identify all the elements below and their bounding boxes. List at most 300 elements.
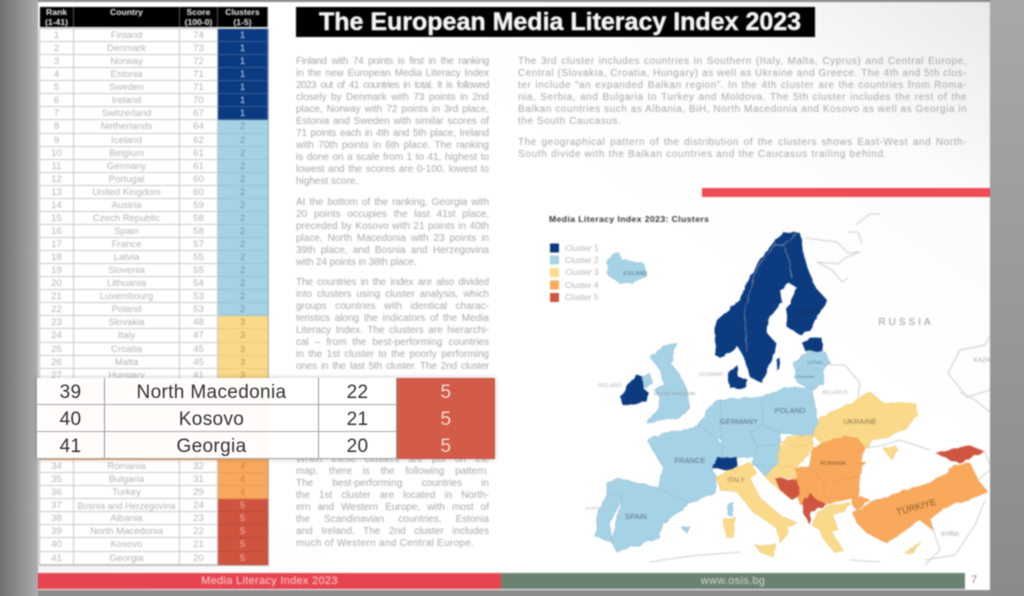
ranking table rows: Lithuania [107, 278, 146, 289]
ranking table rows: 20 [51, 278, 62, 289]
Crimea [883, 445, 898, 460]
ranking table rows: 71 [193, 69, 204, 80]
country labels: ROMANIA [820, 461, 846, 467]
ranking table rows: 2 [240, 291, 245, 302]
Sicily [755, 545, 777, 557]
ranking table rows: Iceland [111, 134, 142, 146]
text: left column paragraph 1: closely by Denmark with 73 points in 2nd [296, 92, 489, 103]
ranking table rows: 40 [51, 539, 62, 550]
Ukraine [813, 392, 917, 448]
row: Georgia [37, 432, 495, 459]
ranking table rows: 9 [54, 134, 59, 146]
Norway, Sweden and Finland [715, 232, 827, 383]
country labels: GERMANY [720, 417, 758, 426]
non-index country outlines [650, 214, 990, 565]
row: Kosovo: 5 [441, 409, 451, 430]
ranking table rows: 45 [193, 344, 204, 354]
background: right strip [990, 0, 1024, 596]
ranking table rows: 19 [51, 265, 62, 276]
text: left column paragraph 2: place, North Macedonia with 23 points in [296, 233, 489, 244]
country labels: LITHUANIA [794, 374, 815, 379]
text: left column paragraph 3: cal – from the best-performing countries [296, 337, 489, 348]
ranking table rows: Switzerland [102, 108, 151, 119]
ranking table rows: Croatia [111, 344, 142, 354]
ranking table rows: 3 [240, 317, 245, 328]
Romania [810, 437, 865, 485]
text: right column paragraph 2: South divide with the Balkan countries and the Caucasus trailing behind. [518, 149, 887, 160]
Denmark [727, 365, 748, 388]
row: North Macedonia: North Macedonia [137, 382, 286, 403]
ranking table rows: 2 [240, 148, 245, 159]
text: right column paragraph 2: The geographical pattern of the distribution of the clusters shows East-West and North- [518, 137, 967, 148]
text: left column paragraph 1: place, Norway with 72 points in 3rd place, [296, 104, 489, 115]
ranking table rows: 1 [240, 43, 245, 54]
text: left column paragraph 1: Finland with 74 points is first in the ranking [296, 56, 489, 67]
text: right column paragraph 1: Central (Slovakia, Croatia, Hungary) as well as Ukraine and Greece. The 4th and 5th clus- [518, 68, 967, 79]
ranking table rows: 60 [193, 174, 204, 185]
ranking table rows: 4 [240, 461, 245, 472]
Thrace [852, 497, 870, 510]
ranking table rows: 23 [51, 317, 62, 328]
ranking table rows: 70 [193, 95, 204, 106]
Austria [752, 445, 780, 467]
ranking table rows: 5 [240, 552, 245, 564]
ranking table rows: 2 [240, 304, 245, 315]
ranking table rows: 3 [240, 357, 245, 368]
ranking table rows: Poland [112, 304, 141, 315]
ranking table rows: 20 [193, 552, 204, 564]
footer left red bar: Media Literacy Index 2023 [201, 575, 338, 587]
row: Georgia: 5 [441, 436, 451, 457]
cluster 5 countries [775, 445, 985, 525]
Montenegro [797, 493, 807, 503]
row: Kosovo: 21 [347, 409, 368, 430]
Corsica [727, 502, 733, 515]
Sardinia [723, 517, 735, 538]
ranking table rows: 26 [51, 357, 62, 368]
text: left column paragraph 1 [296, 56, 490, 187]
ranking table rows: Austria [112, 200, 141, 211]
Hungary [777, 443, 813, 468]
ranking table rows: 2 [240, 239, 245, 250]
ranking table rows: 2 [240, 174, 245, 185]
ranking table rows: 27 [51, 370, 62, 381]
ranking table rows: Luxembourg [100, 291, 153, 302]
text: left column paragraph 4: and Ireland. The 2nd cluster includes [296, 526, 489, 537]
text: right column paragraph 1 [518, 56, 967, 127]
text: left column paragraph 3: groups countries with identical charac- [296, 301, 489, 312]
table header: Clusters [225, 7, 260, 17]
table header: (1-41) [45, 17, 68, 27]
row: Kosovo: Kosovo [179, 409, 244, 430]
Croatia [765, 465, 797, 498]
Estonia [802, 337, 823, 352]
text: left column paragraph 1: lowest and the scores are 0-100, lowest to [296, 164, 489, 175]
text: left column paragraph 1: is done on a scale from 1 to 41, highest to [296, 152, 489, 163]
ranking table rows: 3 [240, 370, 245, 381]
text: left column paragraph 4: the 1st cluster are located in North- [296, 490, 489, 501]
row: North Macedonia: 22 [347, 382, 368, 403]
Bosnia and Herzegovina [775, 478, 800, 500]
ranking table rows: 37 [51, 500, 62, 511]
country labels: LATVIA [807, 360, 823, 365]
cluster 4 countries [795, 437, 988, 543]
table header [40, 7, 268, 27]
Swedish islands [776, 358, 781, 370]
ranking table rows: 64 [193, 121, 204, 132]
ranking table rows: Latvia [114, 252, 139, 263]
ranking table rows: Albania [110, 513, 142, 524]
ranking table rows: Denmark [107, 43, 146, 54]
ranking table rows: 53 [193, 304, 204, 315]
ranking table rows: 74 [193, 30, 204, 41]
country labels: FINLAND [796, 309, 820, 315]
text: left column paragraph 1: 2023 out of 41 countries in total. It is followed [296, 80, 489, 91]
ranking table rows: Germany [107, 161, 146, 172]
ranking table rows: 72 [193, 56, 204, 67]
United Kingdom [647, 343, 690, 423]
legend: Cluster 3 [565, 267, 599, 277]
Slovakia [780, 435, 813, 447]
table header: Score [187, 7, 210, 17]
ranking table rows: 2 [240, 187, 245, 198]
text: left column paragraph 2: 39th place, and Bosnia and Herzegovina [296, 245, 489, 256]
ranking table rows: 3 [240, 330, 245, 341]
ranking table rows: 1 [240, 56, 245, 67]
country labels: KAZA [974, 357, 991, 364]
ranking table rows: 2 [240, 252, 245, 263]
cluster 1 countries [621, 232, 827, 405]
country labels [586, 271, 991, 538]
country labels: RUSSIA [878, 317, 934, 328]
ranking table rows: 2 [240, 121, 245, 132]
Greece [812, 503, 850, 553]
ranking table rows: 21 [51, 291, 62, 302]
ranking table rows: 47 [193, 330, 204, 341]
ranking table rows: 34 [51, 461, 62, 472]
ranking table rows: 62 [193, 134, 204, 146]
row: North Macedonia [37, 378, 495, 405]
text: left column paragraph 3: into clusters using cluster analysis, which [296, 289, 489, 300]
text: right column paragraph 1: The 3rd cluster includes countries in Southern (Italy, Malta, Cyprus) and Central Europe, [518, 56, 967, 67]
ranking table rows: Norway [110, 56, 143, 67]
ranking table rows: 55 [193, 252, 204, 263]
ranking table rows: Belgium [109, 148, 144, 159]
text: left column paragraph 4: The best-performing countries in [296, 478, 489, 489]
text: left column paragraph 3: Literacy Index. The clusters are hierarchi- [296, 325, 489, 336]
country labels: BELARUS [822, 390, 848, 396]
ranking table rows: Malta [115, 357, 138, 368]
ranking table rows: Slovakia [108, 317, 145, 328]
ranking table rows: 1 [54, 30, 59, 41]
ranking table rows: 5 [240, 513, 245, 524]
ranking table rows: 7 [54, 108, 59, 119]
ranking table rows: Slovenia [108, 265, 145, 276]
background: left strip [0, 0, 38, 596]
legend: Cluster 2 [565, 255, 599, 265]
Czech Republic [750, 425, 780, 447]
text: right column paragraph 1: nia, Serbia, and Bulgaria to Turkey and Moldova. The 5th cluster includes the rest of the [518, 92, 967, 103]
text: left column paragraph 1: with 70th points in 6th place. The ranking [296, 140, 489, 151]
ranking table rows: 38 [51, 513, 62, 524]
text: left column paragraph 3: in the 1st cluster to the poorly performing [296, 349, 489, 360]
ranking table rows: France [112, 239, 141, 250]
row: Kosovo: 40 [60, 409, 81, 430]
ranking table rows: 32 [193, 461, 204, 472]
ranking table rows: 61 [193, 148, 204, 159]
text: right column paragraph 1: Balkan countries such as Albania, BiH, North Macedonia and Kosovo as well as Georgia in [518, 104, 967, 115]
Latvia [793, 352, 830, 370]
text: left column paragraph 2: preceded by Kosovo with 21 points in 40th [296, 221, 489, 232]
cluster 2 countries [595, 252, 830, 552]
ranking table rows: 1 [240, 108, 245, 119]
red accent bar [702, 188, 990, 197]
ranking table rows: 22 [51, 304, 62, 315]
country labels: ITALY [727, 477, 745, 484]
Bulgaria [823, 477, 860, 497]
ranking table rows: 13 [51, 187, 62, 198]
ranking table rows: Netherlands [101, 121, 152, 132]
text: right column paragraph 2 [518, 137, 967, 160]
country labels: FRANCE [675, 456, 705, 465]
ranking table rows: 2 [240, 226, 245, 237]
ranking table rows: United Kingdom [92, 187, 161, 198]
ranking table rows: 10 [51, 148, 62, 159]
Iceland [607, 252, 647, 283]
footer left red bar [38, 573, 501, 589]
Cyprus [905, 542, 920, 553]
ranking table rows: 71 [193, 82, 204, 93]
ranking table rows: 5 [54, 82, 59, 93]
Lithuania [795, 370, 823, 390]
ranking table rows: Bulgaria [109, 474, 144, 485]
ranking table rows: 3 [54, 56, 59, 67]
ranking table rows: 24 [193, 500, 204, 511]
ranking table rows: 53 [193, 291, 204, 302]
ranking table rows: 2 [240, 278, 245, 289]
Georgia [935, 445, 985, 463]
ranking table rows: 5 [240, 539, 245, 550]
ranking table rows: 36 [51, 487, 62, 498]
legend: Cluster 4 [565, 280, 599, 290]
ranking table rows: Italy [118, 330, 135, 341]
text: left column paragraph 1: in the new European Media Literacy Index [296, 68, 489, 79]
ranking table rows: 1 [240, 95, 245, 106]
ranking table rows: Estonia [110, 69, 142, 80]
Northern Ireland [642, 374, 652, 388]
ranking table rows: 39 [51, 526, 62, 537]
ranking table rows: Ireland [112, 95, 141, 106]
Spain [607, 478, 690, 552]
text: left column paragraph 3: ones in the last 5th cluster. The 2nd cluster [296, 361, 489, 372]
text: left column paragraph 1: Estonia and Sweden with similar scores of [296, 116, 489, 127]
row: North Macedonia: 5 [441, 382, 451, 403]
ranking table rows: Hungary [108, 370, 145, 381]
Poland [762, 388, 818, 437]
Portugal [595, 493, 622, 543]
ranking table rows: 5 [240, 500, 245, 511]
ranking table rows: Georgia [109, 552, 144, 564]
ranking table rows: Portugal [109, 174, 144, 185]
legend [550, 243, 599, 302]
legend: Cluster 5 [565, 292, 599, 302]
country labels: PORTUGAL [586, 506, 611, 511]
text: left column paragraph 1: highest score. [296, 176, 358, 187]
ranking table rows: 41 [51, 552, 62, 564]
ranking table rows: 4 [54, 69, 59, 80]
ranking table rows: Bosnia and Herzegovina [77, 501, 176, 511]
Moldova [843, 437, 865, 454]
text: left column paragraph 4: much of Western and Central Europe. [296, 538, 474, 549]
ranking table rows: 2 [240, 161, 245, 172]
ranking table rows: 21 [193, 539, 204, 550]
footer right green bar: www.osis.bg [701, 575, 765, 587]
ranking table rows: 31 [193, 474, 204, 485]
ranking table rows: Turkey [112, 487, 141, 498]
ranking table rows: 25 [51, 344, 62, 354]
ranking table rows: 35 [51, 474, 62, 485]
text: left column paragraph 4: When these clusters are put on the [296, 454, 489, 465]
text: right column paragraph 1: ter include “an expanded Balkan region”. In the 4th cluster are the countries from Roma- [518, 80, 967, 91]
ranking table rows: North Macedonia [90, 526, 163, 537]
country labels: UKRAINE [843, 417, 877, 426]
ranking table rows: 24 [51, 330, 62, 341]
text: left column paragraph 4: the Scandinavian countries, Estonia [296, 514, 489, 525]
highlight overlay: bottom three countries [37, 378, 495, 459]
Scandinavian borders [745, 234, 796, 352]
ranking table rows: Romania [107, 461, 146, 472]
ranking table rows: 2 [240, 134, 245, 146]
text: left column paragraph 3 [296, 277, 490, 372]
ranking table rows: 45 [193, 357, 204, 368]
ranking table rows: 61 [193, 161, 204, 172]
France [647, 425, 723, 503]
text: left column paragraph 3: The countries in the index are also divided [296, 277, 489, 288]
ranking table rows: 41 [193, 370, 204, 381]
ranking table rows: 1 [240, 30, 245, 41]
Switzerland [712, 457, 738, 470]
country labels: DENMARK [698, 372, 724, 378]
country labels: POLAND [775, 406, 806, 415]
text: left column paragraph 2: At the bottom of the ranking, Georgia with [296, 197, 489, 208]
map heading: Media Literacy Index 2023: Clusters [549, 214, 709, 224]
ranking table rows: 15 [51, 213, 62, 224]
ranking table rows: 14 [51, 200, 62, 211]
ranking table rows: 2 [240, 200, 245, 211]
footer right green bar [501, 573, 965, 589]
country labels: UNITED KINGDOM [653, 391, 695, 397]
row: Kosovo [37, 405, 495, 432]
ranking table rows: 18 [51, 252, 62, 263]
Germany [720, 397, 763, 458]
ranking table rows: 8 [54, 121, 59, 132]
Balearic islands [682, 526, 690, 533]
row: Georgia: 20 [347, 436, 368, 457]
ranking table rows: 5 [240, 526, 245, 537]
Serbia [795, 467, 825, 497]
ranking table rows: 60 [193, 187, 204, 198]
row: Georgia: 41 [60, 436, 81, 457]
Slovenia [755, 465, 777, 476]
country labels: ICELAND [623, 271, 647, 277]
text: left column paragraph 1: 71 points each in 4th and 5th place, Ireland [296, 128, 489, 139]
ranking table rows: 59 [193, 200, 204, 211]
country labels: SPAIN [625, 512, 647, 521]
ranking table rows: 2 [54, 43, 59, 54]
text: left column paragraph 4: map, there is the following pattern. [296, 466, 489, 477]
ranking table rows: Spain [114, 226, 139, 237]
ranking table rows: 54 [193, 278, 204, 289]
text: left column paragraph 2: with 24 points in 38th place. [296, 257, 417, 268]
cluster 4 base under the Balkans [790, 465, 860, 505]
title: The European Media Literacy Index 2023 [319, 8, 801, 36]
text: left column paragraph 4: ern and Western Europe, with most of [296, 502, 489, 513]
ranking table rows: 1 [240, 82, 245, 93]
ranking table rows: Kosovo [110, 539, 142, 550]
ranking table rows: 1 [240, 69, 245, 80]
ranking table rows: 58 [193, 226, 204, 237]
ranking table rows [40, 29, 268, 565]
ranking table rows: 55 [193, 265, 204, 276]
row: North Macedonia: 39 [60, 382, 81, 403]
country labels: IRELAND [598, 383, 622, 389]
ranking table rows: 73 [193, 43, 204, 54]
ranking table rows: 4 [240, 487, 245, 498]
ranking table rows: Finland [111, 30, 142, 41]
ranking table rows: 16 [51, 226, 62, 237]
ranking table rows: 2 [240, 213, 245, 224]
Albania, Kosovo and North Macedonia [803, 493, 827, 525]
page number: 7 [971, 574, 977, 586]
legend: Cluster 1 [565, 243, 599, 253]
text: left column paragraph 2: 20 points occupies the last 41st place, [296, 209, 489, 220]
text: left column paragraph 2 [296, 197, 490, 268]
Benelux [698, 400, 722, 440]
table header: Rank [46, 7, 67, 17]
ranking table rows: 48 [193, 317, 204, 328]
text: right column paragraph 1: the South Caucasus. [518, 116, 621, 127]
table header: (100-0) [185, 17, 212, 27]
ranking table rows: 23 [193, 513, 204, 524]
ranking table rows: 57 [193, 239, 204, 250]
ranking table rows: 22 [193, 526, 204, 537]
Türkiye [853, 463, 988, 543]
ranking table rows: 12 [51, 174, 62, 185]
row: Georgia: Georgia [176, 436, 247, 457]
table header: (1-5) [233, 17, 252, 27]
cluster 3 countries [717, 392, 920, 557]
country labels: SYRIA [941, 532, 959, 538]
ranking table rows: 58 [193, 213, 204, 224]
ranking table rows: 11 [52, 161, 61, 172]
ranking table rows: 6 [54, 95, 59, 106]
Ireland [621, 375, 649, 405]
land masses [595, 232, 988, 557]
ranking table rows: 29 [193, 487, 204, 498]
ranking table rows: Sweden [109, 82, 144, 93]
text: left column paragraph 4 [296, 454, 490, 549]
ranking table rows: 3 [240, 344, 245, 354]
country labels: TÜRKIYE [895, 497, 938, 518]
ranking table rows: 2 [240, 265, 245, 276]
ranking table rows: 17 [51, 239, 62, 250]
table header: Country [110, 7, 143, 17]
text: left column paragraph 3: teristics along the indicators of the Media [296, 313, 489, 324]
Italy [717, 463, 797, 543]
ranking table rows: 67 [193, 108, 204, 119]
ranking table rows: 4 [240, 474, 245, 485]
ranking table rows: Czech Republic [93, 213, 160, 224]
